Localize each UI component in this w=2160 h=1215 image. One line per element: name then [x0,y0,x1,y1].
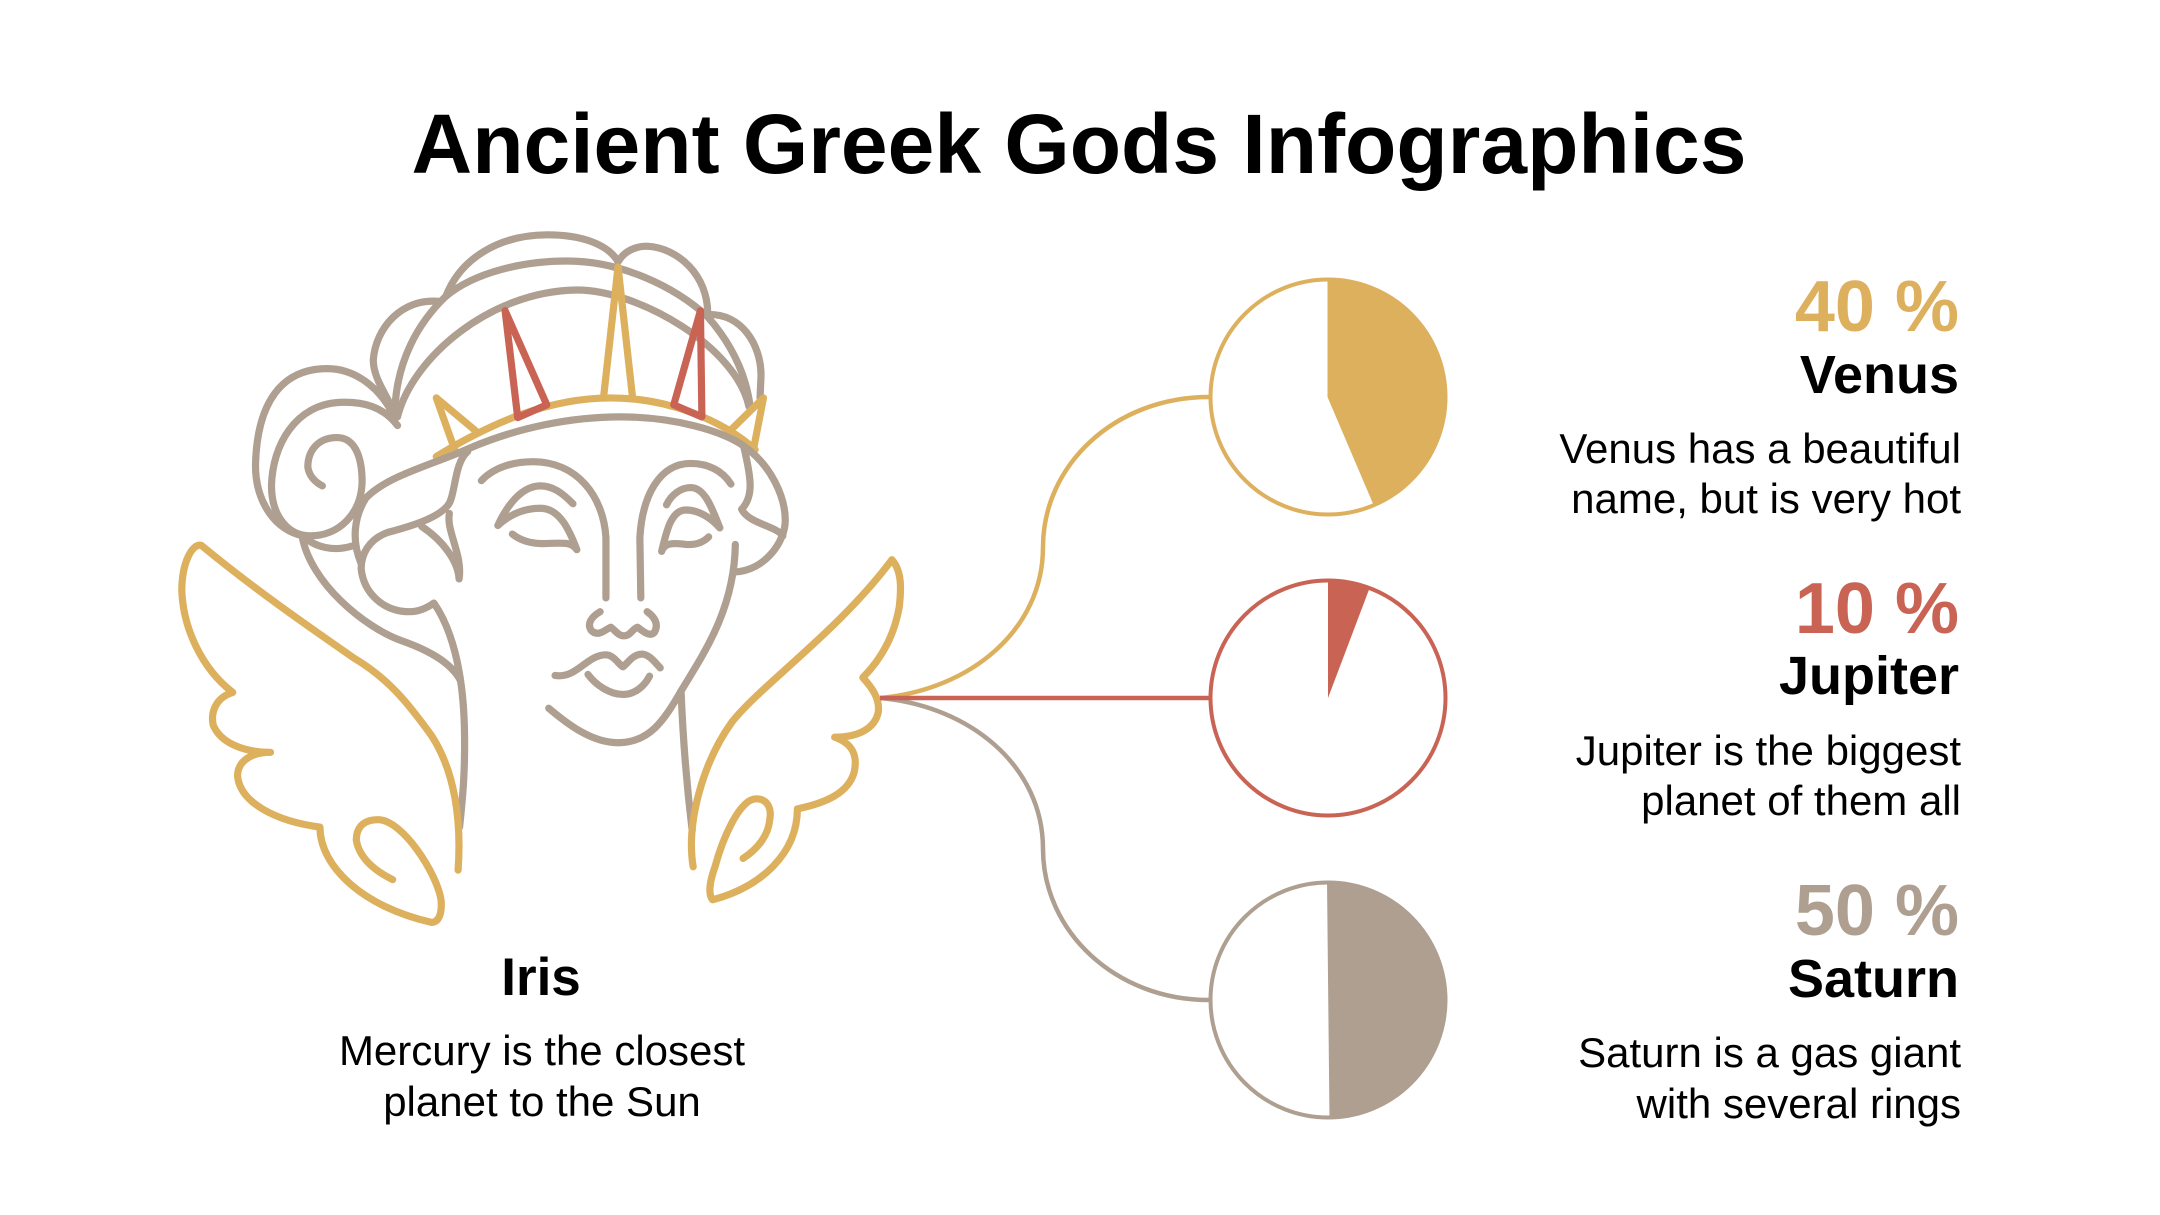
text: Jupiter description: planet of them all [1641,777,1961,824]
icon: hair and face lines [255,235,783,831]
pie chart: Saturn 50% [1210,881,1447,1119]
text block: Iris description: Mercury is the closest [339,1027,745,1074]
heading: Venus: Venus [1800,345,1959,405]
illustration: winged goddess head [182,235,901,922]
connector: taupe curve [880,698,1209,1000]
heading: Iris: Iris [501,948,581,1007]
stat block: Jupiter [1576,569,1961,824]
stat block: Saturn [1578,871,1961,1127]
pie chart: Venus 40% [1210,278,1447,514]
stat block: Venus [1559,267,1961,522]
percentage: 40 %: 40 % [1795,267,1959,347]
icon: gold crown [436,267,763,457]
title: Ancient Greek Gods Infographics [412,97,1746,191]
percentage: 10 %: 10 % [1795,569,1959,649]
icon: left and right wings [182,545,901,922]
heading: Saturn: Saturn [1788,949,1959,1009]
percentage: 50 %: 50 % [1795,871,1959,951]
heading: Jupiter: Jupiter [1779,646,1959,706]
text: Jupiter description: Jupiter is the biggest [1576,727,1961,774]
text: Saturn description: Saturn is a gas giant [1578,1029,1961,1076]
icon: red crown spikes [505,311,702,418]
text: Venus description: name, but is very hot [1571,475,1961,522]
text: Venus description: Venus has a beautiful [1559,425,1961,472]
text block: Iris description: planet to the Sun [383,1078,701,1125]
icon: headband [355,417,785,572]
connector: gold curve [880,397,1209,698]
connector: red line [880,696,1209,700]
text: Saturn description: with several rings [1636,1080,1961,1127]
pie chart: Jupiter 10% [1210,579,1446,816]
